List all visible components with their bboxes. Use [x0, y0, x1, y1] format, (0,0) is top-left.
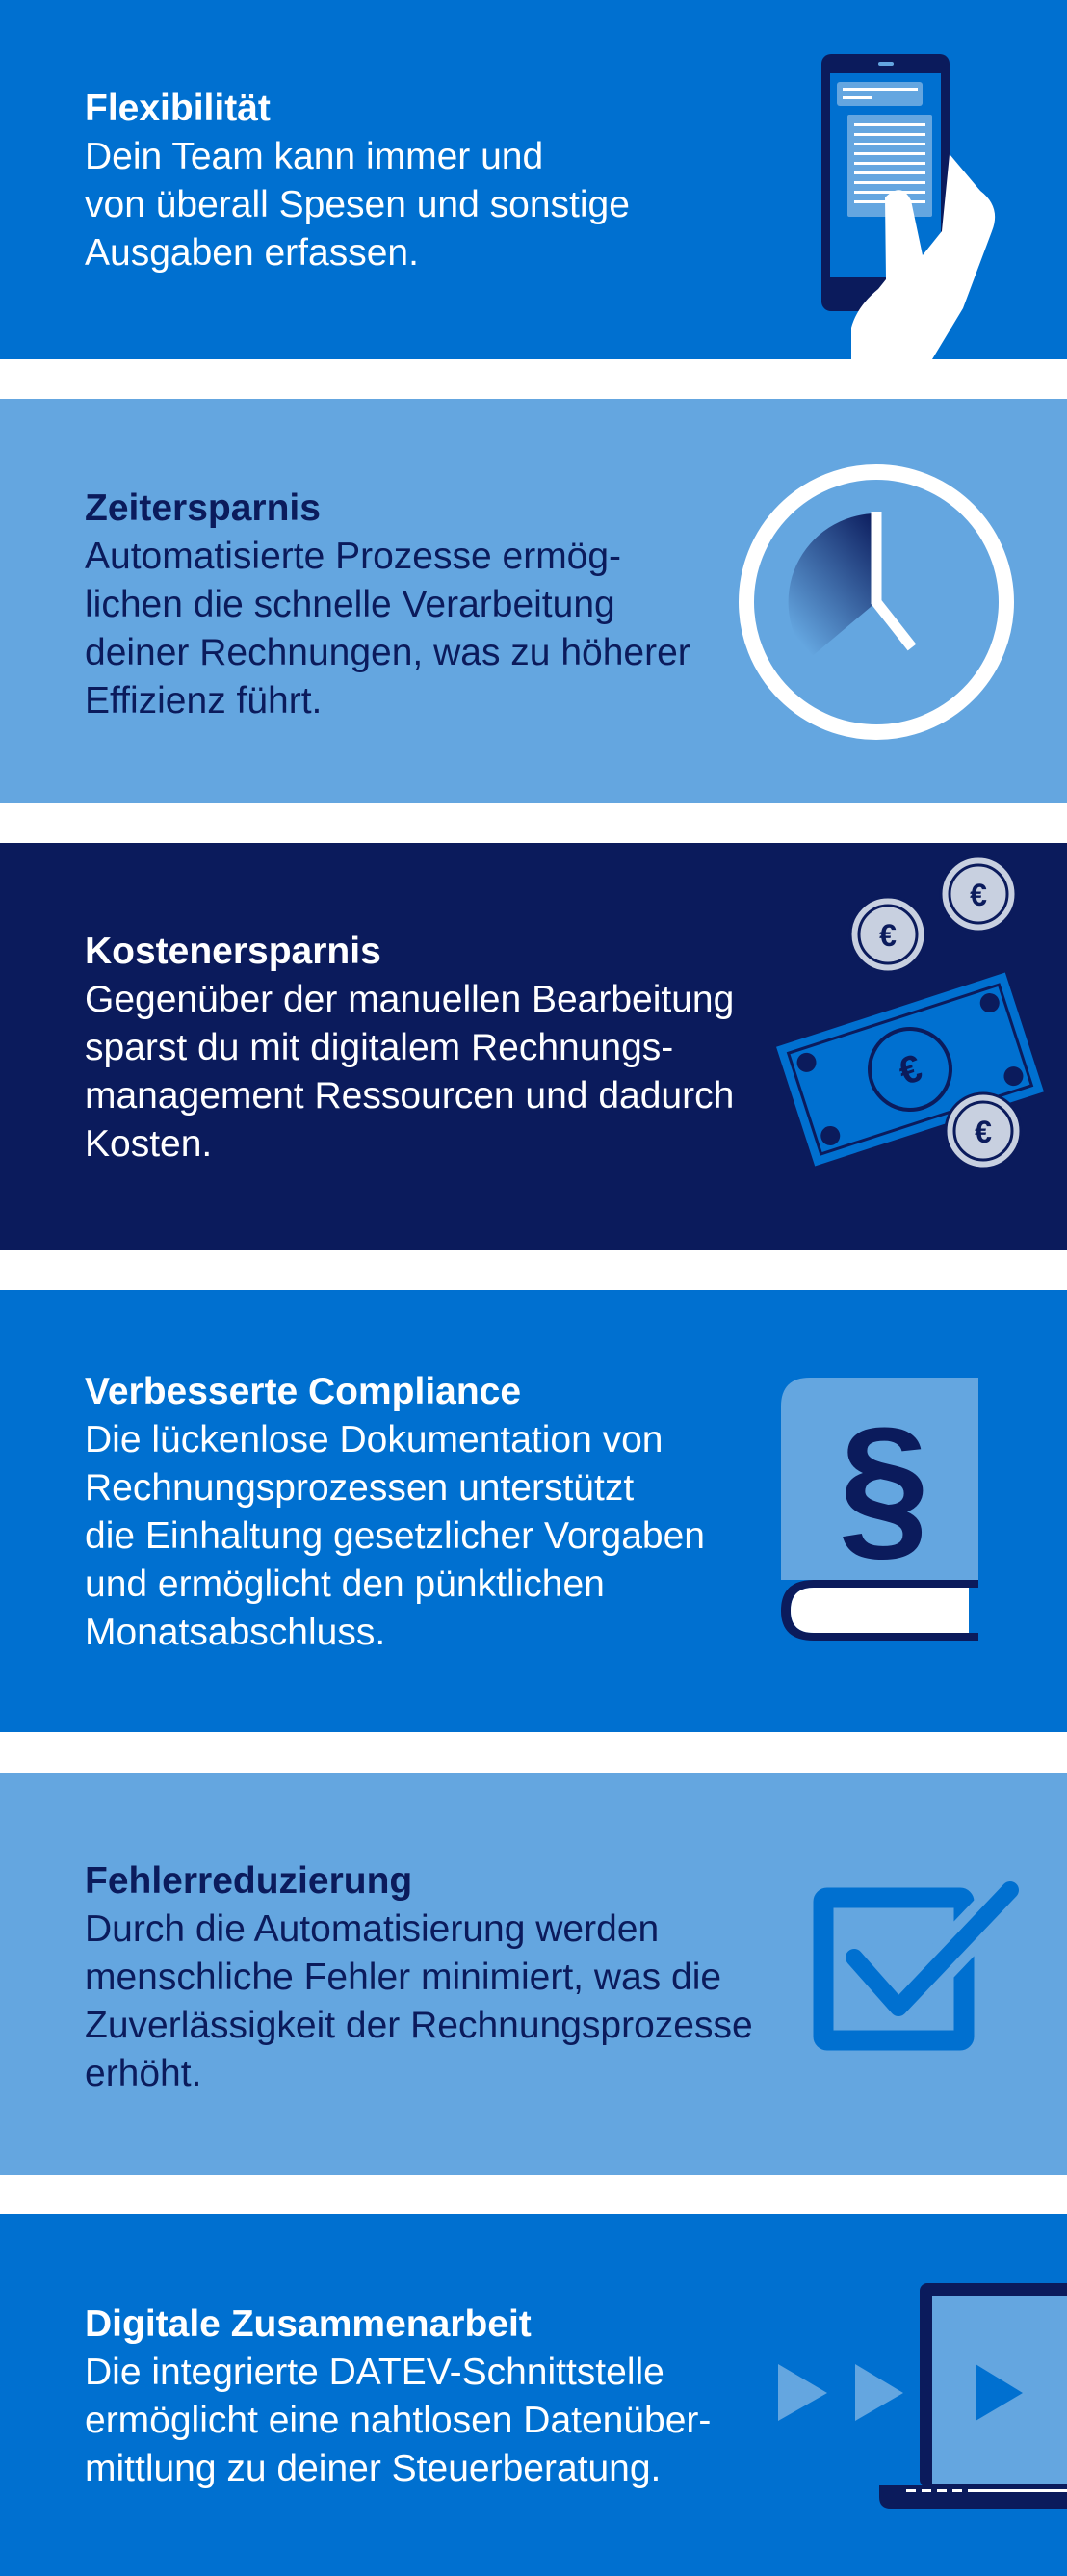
text: Verbesserte Compliance: Monatsabschluss.: [85, 1612, 385, 1653]
text: Kostenersparnis: [85, 931, 734, 1165]
icon: money: [776, 857, 1044, 1168]
text: Verbesserte Compliance: Rechnungsprozessen unterstützt: [85, 1467, 634, 1509]
text: Kostenersparnis: Kostenersparnis: [85, 931, 381, 972]
text: Verbesserte Compliance: [85, 1371, 705, 1653]
text: Zeitersparnis: Automatisierte Prozesse ermög-: [85, 536, 621, 577]
text: Zeitersparnis: deiner Rechnungen, was zu höherer: [85, 632, 690, 673]
text: Verbesserte Compliance: Die lückenlose Dokumentation von: [85, 1419, 664, 1460]
panel: Verbesserte Compliance: [0, 1290, 1067, 1732]
icon: laptop with arrows: [778, 2283, 1067, 2509]
text: Kostenersparnis: Gegenüber der manuellen Bearbeitung: [85, 979, 734, 1020]
text: Digitale Zusammenarbeit: mittlung zu deiner Steuerberatung.: [85, 2448, 661, 2489]
icon: checkbox: [813, 1881, 1019, 2050]
text: Flexibilität: Dein Team kann immer und: [85, 136, 543, 177]
icon: money: €: [970, 878, 987, 912]
panel: Kostenersparnis: [0, 843, 1067, 1250]
text: Fehlerreduzierung: Fehlerreduzierung: [85, 1860, 412, 1902]
text: Fehlerreduzierung: Zuverlässigkeit der Rechnungsprozesse: [85, 2005, 753, 2046]
text: Verbesserte Compliance: Verbesserte Compliance: [85, 1371, 521, 1412]
icon: clock: [739, 464, 1014, 740]
text: Kostenersparnis: management Ressourcen und dadurch: [85, 1075, 734, 1117]
text: Digitale Zusammenarbeit: Die integrierte DATEV-Schnittstelle: [85, 2352, 664, 2393]
text: Fehlerreduzierung: [85, 1860, 753, 2094]
text: Kostenersparnis: Kosten.: [85, 1123, 212, 1165]
text: Fehlerreduzierung: erhöht.: [85, 2053, 201, 2094]
icon: money: €: [879, 918, 897, 953]
text: Zeitersparnis: [85, 487, 690, 722]
text: Kostenersparnis: sparst du mit digitalem Rechnungs-: [85, 1027, 673, 1068]
icon: money: €: [894, 1047, 927, 1093]
icon: money: €: [975, 1115, 992, 1149]
text: Digitale Zusammenarbeit: Digitale Zusammenarbeit: [85, 2303, 532, 2345]
panel: Digitale Zusammenarbeit: [0, 2214, 1067, 2576]
text: Verbesserte Compliance: die Einhaltung gesetzlicher Vorgaben: [85, 1515, 705, 1557]
text: Fehlerreduzierung: Durch die Automatisierung werden: [85, 1908, 659, 1950]
text: Flexibilität: Flexibilität: [85, 88, 271, 129]
text: Fehlerreduzierung: menschliche Fehler minimiert, was die: [85, 1957, 721, 1998]
text: Flexibilität: von überall Spesen und sonstige: [85, 184, 630, 225]
text: Flexibilität: [85, 88, 630, 274]
panel: Flexibilität: [0, 0, 1067, 359]
text: Zeitersparnis: Zeitersparnis: [85, 487, 321, 529]
text: Zeitersparnis: lichen die schnelle Verarbeitung: [85, 584, 615, 625]
text: Verbesserte Compliance: und ermöglicht den pünktlichen: [85, 1564, 605, 1605]
panel: Zeitersparnis: [0, 399, 1067, 803]
icon: phone in hand: [821, 54, 996, 359]
text: Digitale Zusammenarbeit: ermöglicht eine nahtlosen Datenüber-: [85, 2400, 711, 2441]
icon: law book: [781, 1378, 978, 1641]
panel: Fehlerreduzierung: [0, 1773, 1067, 2175]
text: Digitale Zusammenarbeit: [85, 2303, 711, 2489]
text: Flexibilität: Ausgaben erfassen.: [85, 232, 419, 274]
text: Zeitersparnis: Effizienz führt.: [85, 680, 322, 722]
icon: law book: §: [839, 1394, 929, 1577]
